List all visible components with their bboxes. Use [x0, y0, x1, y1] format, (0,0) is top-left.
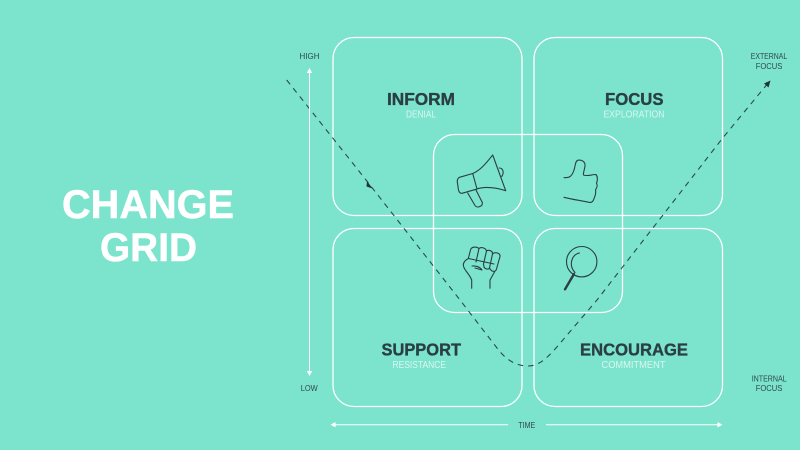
title: [62, 183, 234, 270]
panel: encourage: [534, 228, 722, 406]
heading: inform: INFORM: [387, 89, 455, 109]
label: internal focus: FOCUS: [756, 383, 783, 393]
label: internal focus: [752, 374, 787, 393]
heading: support: RESISTANCE: [392, 360, 446, 371]
label: external focus: FOCUS: [756, 61, 783, 71]
label: high: HIGH: [300, 51, 320, 61]
heading: inform: DENIAL: [406, 110, 436, 120]
icon: magnifying glass: [565, 247, 597, 289]
heading: focus: [604, 89, 664, 120]
label: low: LOW: [301, 383, 318, 393]
panel: center overlap: [434, 134, 622, 312]
heading: encourage: [580, 340, 688, 371]
heading: support: SUPPORT: [382, 340, 461, 360]
arrow: time axis: [330, 422, 722, 427]
label: external focus: EXTERNAL: [751, 51, 788, 61]
heading: focus: EXPLORATION: [604, 110, 664, 120]
icon: raised fist: [463, 247, 500, 288]
panel: focus: [534, 38, 722, 216]
arrow: vertical axis: [307, 68, 312, 376]
label: internal focus: INTERNAL: [752, 374, 787, 384]
heading: support: [382, 340, 461, 371]
panel: support: [333, 228, 522, 406]
label: time: TIME: [518, 420, 536, 430]
heading: encourage: COMMITMENT: [602, 360, 666, 371]
heading: encourage: ENCOURAGE: [580, 340, 688, 360]
icon: megaphone: [457, 155, 506, 207]
arrow: change curve dashed: [287, 80, 770, 366]
panel: inform: [333, 38, 522, 216]
label: external focus: [751, 51, 788, 71]
heading: focus: FOCUS: [605, 89, 664, 109]
title: CHANGE: [62, 183, 234, 227]
icon: thumbs up: [564, 160, 597, 202]
title: GRID: [100, 226, 197, 270]
heading: inform: [387, 89, 455, 120]
